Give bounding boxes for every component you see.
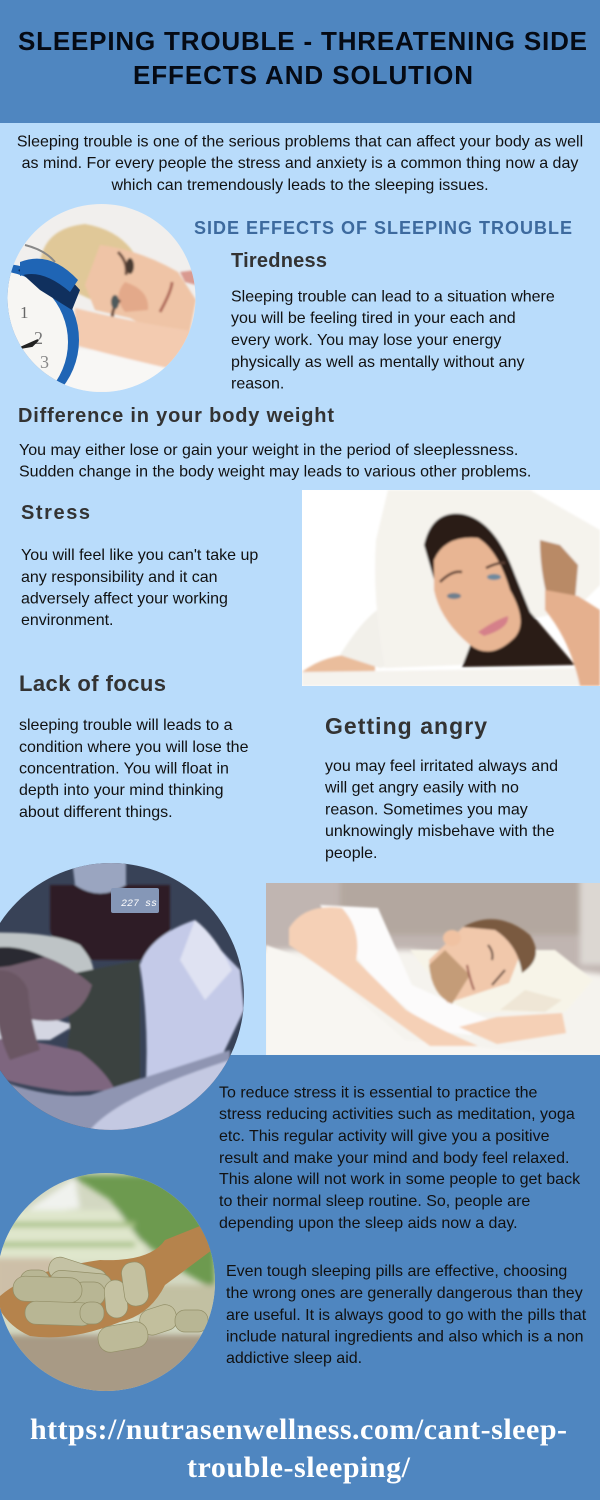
text: getting angry: will get angry easily with no — [324, 780, 519, 796]
photo: sleeping man — [266, 883, 600, 1055]
photo: sleepless man with clock — [0, 860, 247, 1135]
photo: woman with alarm clock — [8, 204, 196, 392]
text: lack of focus — [19, 717, 249, 821]
text: lack of focus: sleeping trouble will leads to a — [19, 717, 233, 734]
text: body weight: You may either lose or gain your weight in the period of sleeplessness. — [19, 442, 518, 459]
photo: sleepless man with clock: 227 ss — [121, 899, 157, 910]
text: body weight: Sudden change in the body weight may leads to various other problems. — [19, 464, 531, 480]
text: sleeping pills: are useful. It is always good to go with the pills that — [226, 1307, 587, 1324]
intro paragraph: Sleeping trouble is one of the serious problems that can affect your body as well — [17, 134, 583, 150]
photo: woman with alarm clock: 1 — [20, 303, 28, 322]
title — [18, 26, 587, 90]
text: lack of focus: about different things. — [19, 804, 173, 821]
text: sleeping pills: the wrong ones are generally dangerous than they — [226, 1285, 583, 1302]
text: reducing stress: To reduce stress it is essential to practice the — [219, 1084, 537, 1102]
text: stress: environment. — [21, 612, 114, 629]
text: stress: any responsibility and it can — [21, 569, 218, 586]
text: stress: adversely affect your working — [21, 590, 228, 608]
text: tiredness — [231, 288, 555, 392]
text: getting angry — [324, 758, 558, 862]
text: sleeping pills: Even tough sleeping pills are effective, choosing — [226, 1263, 567, 1280]
header band — [0, 0, 600, 123]
heading: lack of focus: Lack of focus — [19, 671, 166, 696]
text: stress: You will feel like you can't take up — [21, 547, 258, 564]
intro paragraph: which can tremendously leads to the sleeping issues. — [110, 177, 489, 194]
text: body weight — [19, 442, 531, 480]
footer link: trouble-sleeping/ — [187, 1451, 411, 1484]
text: sleeping pills: addictive sleep aid. — [226, 1350, 362, 1367]
text: tiredness: you will be feeling tired in your each and — [231, 310, 516, 327]
text: lack of focus: condition where you will lose the — [19, 739, 249, 756]
text: sleeping pills: include natural ingredients and also which is a non — [226, 1328, 584, 1346]
photo: woman with alarm clock: 3 — [40, 352, 49, 372]
text: lack of focus: concentration. You will float in — [19, 760, 229, 778]
heading: tiredness: Tiredness — [231, 250, 327, 272]
photo: woman with alarm clock: 2 — [34, 328, 43, 348]
photo: woman under pillow — [302, 490, 600, 686]
text: reducing stress: etc. This regular activity will give you a positive — [219, 1128, 550, 1145]
text: tiredness: Sleeping trouble can lead to a situation where — [231, 288, 555, 306]
text: reducing stress: stress reducing activities such as meditation, yoga — [219, 1106, 575, 1123]
title: SLEEPING TROUBLE - THREATENING SIDE — [18, 26, 587, 56]
text: tiredness: reason. — [231, 376, 284, 392]
intro paragraph: as mind. For every people the stress and anxiety is a common thing now a day — [22, 155, 578, 172]
text: reducing stress: This alone will not work in some people to get back — [219, 1171, 581, 1188]
text: reducing stress — [219, 1084, 581, 1232]
text: tiredness: every work. You may lose your energy — [231, 332, 501, 349]
text: stress — [21, 547, 258, 629]
text: reducing stress: to their normal sleep routine. So, people are — [219, 1193, 530, 1210]
text: lack of focus: depth into your mind thinking — [19, 782, 224, 799]
text: sleeping pills — [226, 1263, 587, 1367]
text: reducing stress: result and make your mind and body feel relaxed. — [219, 1150, 569, 1167]
heading: getting angry: Getting angry — [325, 713, 487, 739]
text: tiredness: physically as well as mentally without any — [231, 354, 524, 371]
text: getting angry: you may feel irritated always and — [325, 758, 558, 775]
text: reducing stress: depending upon the sleep aids now a day. — [219, 1215, 518, 1232]
photo: capsules on wooden spoon — [0, 1170, 220, 1400]
heading: difference in body weight: Difference in your body weight — [18, 405, 334, 427]
title: EFFECTS AND SOLUTION — [133, 60, 473, 90]
text: getting angry: people. — [325, 845, 378, 862]
text: getting angry: reason. Sometimes you may — [325, 802, 528, 818]
section heading: side effects: SIDE EFFECTS OF SLEEPING TROUBLE — [194, 218, 572, 238]
footer link — [30, 1413, 567, 1484]
heading: stress: Stress — [21, 502, 90, 524]
solution band — [0, 1055, 600, 1500]
footer link: https://nutrasenwellness.com/cant-sleep- — [30, 1413, 567, 1446]
text: getting angry: unknowingly misbehave with the — [325, 823, 555, 840]
intro paragraph — [17, 134, 583, 194]
